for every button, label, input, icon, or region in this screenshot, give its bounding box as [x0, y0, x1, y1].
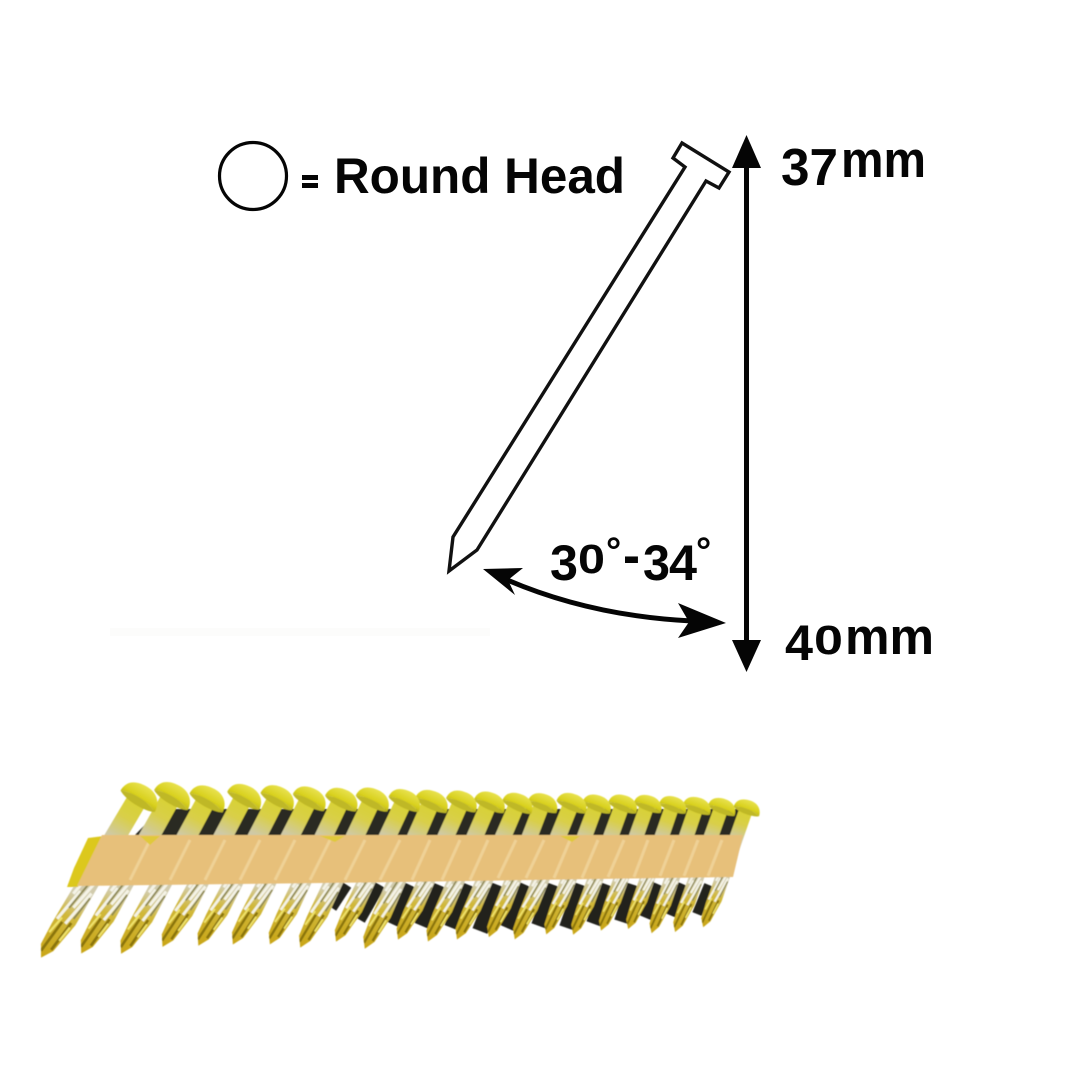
label: angle 30-34 degrees: [550, 524, 711, 591]
label: 40mm: [785, 608, 934, 671]
label: angle 30-34 degrees: -: [623, 524, 640, 586]
faint background smudge: [110, 628, 490, 636]
nail diagram outline: [449, 143, 729, 571]
label: angle 30-34 degrees: °: [606, 531, 621, 573]
label: 40mm: 0: [814, 617, 843, 663]
label: angle 30-34 degrees: 4: [669, 535, 697, 591]
legend label: Round Head: [334, 148, 625, 204]
paper tape: [77, 835, 743, 886]
label: 40mm: mm: [845, 608, 934, 665]
label: angle 30-34 degrees: 3: [643, 535, 670, 591]
legend: round head: [220, 142, 625, 210]
yellow tape end: [67, 836, 104, 887]
tape texture: [130, 840, 722, 880]
label: 37mm: mm: [841, 131, 926, 188]
equals sign: [302, 175, 318, 188]
arrow: vertical length: [732, 135, 761, 672]
arrow: curved angle: [483, 568, 726, 638]
icon: round head circle: [220, 142, 286, 210]
label: 40mm: 4: [785, 615, 813, 671]
label: angle 30-34 degrees: °: [696, 531, 711, 573]
label: 37mm: 37: [781, 139, 838, 197]
photo: collated paper tape nail strip: [27, 776, 763, 970]
label: angle 30-34 degrees: 3: [550, 535, 578, 591]
nails: [27, 776, 763, 970]
dark back nails: [135, 809, 745, 931]
label: 37mm: [781, 131, 926, 197]
label: angle 30-34 degrees: 0: [578, 536, 605, 582]
